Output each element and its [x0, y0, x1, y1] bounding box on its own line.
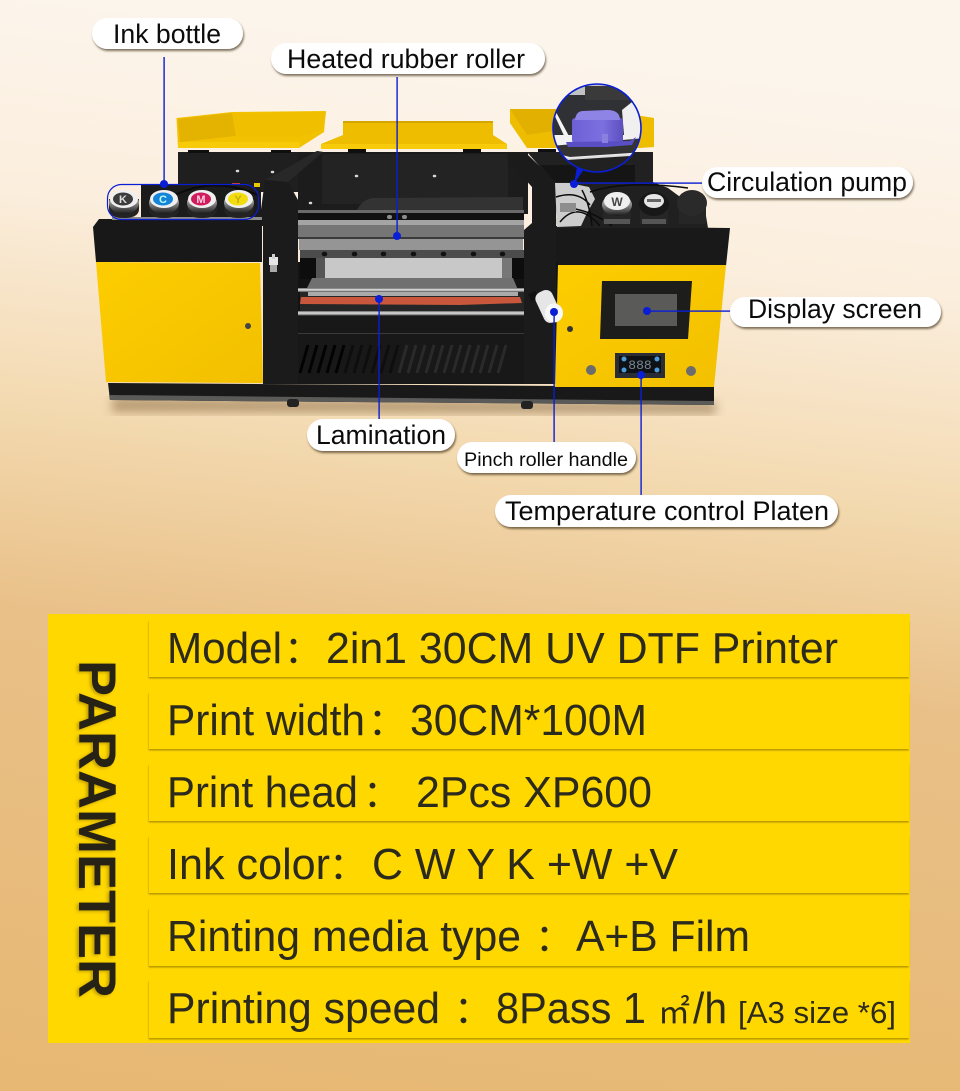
row: printing speed — [149, 979, 909, 1038]
label: Pinch roller handle — [457, 442, 636, 473]
ground shadow — [112, 398, 716, 414]
lamination leader — [375, 295, 383, 419]
row: printing speed: [A3 size *6] — [738, 995, 896, 1030]
bottle M: M — [196, 194, 206, 206]
row: model: Model — [167, 625, 282, 673]
side knob — [269, 254, 278, 272]
row: printing speed: 8Pass 1 — [496, 985, 646, 1033]
panel screws — [237, 171, 435, 203]
bottle W — [602, 192, 632, 224]
bottle C: C — [159, 194, 167, 206]
row: printing speed: ： — [454, 979, 492, 1034]
row: media type: ： — [535, 907, 573, 962]
temperature leader — [637, 371, 645, 495]
row: model: 2in1 30CM UV DTF Printer — [326, 625, 838, 673]
row: model: ： — [284, 619, 322, 674]
pinch roller handle — [528, 288, 563, 325]
lamination red plate — [300, 297, 522, 305]
row: printing speed: /h — [693, 985, 727, 1033]
label: Pinch roller handle: Pinch roller handle — [464, 449, 628, 471]
middle lid — [321, 121, 507, 149]
temperature controller — [615, 353, 665, 378]
row: ink color — [149, 835, 909, 893]
leader lines and dots — [108, 57, 731, 495]
row: print head: ： — [363, 763, 401, 818]
bottle white 2 — [639, 192, 669, 224]
left lid — [176, 111, 326, 148]
right yellow door — [555, 265, 726, 387]
row: ink color: Ink color — [167, 841, 330, 889]
temperature controller: 888 — [628, 358, 652, 373]
vent panel — [288, 333, 530, 384]
label: Circulation pump: Circulation pump — [707, 167, 907, 197]
main body — [93, 219, 730, 409]
row: print head — [149, 763, 909, 821]
label: Lamination: Lamination — [316, 420, 446, 450]
row: model — [149, 619, 909, 677]
top lids — [176, 109, 654, 149]
bottle K: K — [119, 194, 127, 206]
row: printing speed: ㎡ — [658, 987, 690, 1033]
bottle black cap — [677, 190, 707, 224]
drive belt — [357, 197, 523, 210]
row: printing speed: Printing speed — [167, 985, 440, 1033]
bottle W: W — [611, 195, 623, 209]
row: ink color: C W Y K +W +V — [372, 841, 678, 889]
label: Display screen: Display screen — [748, 294, 922, 324]
row: print width: Print width — [167, 697, 365, 745]
row: print head: 2Pcs XP600 — [416, 769, 652, 817]
row: ink color: ： — [329, 835, 367, 890]
bottle C — [149, 190, 179, 218]
row: print width: 30CM*100M — [410, 697, 647, 745]
label: Temperature control Platen: Temperature control Platen — [505, 496, 829, 526]
bottle Y: Y — [234, 194, 242, 206]
bottle K — [109, 190, 139, 218]
parameter panel — [48, 614, 910, 1043]
steel rods — [287, 288, 531, 316]
row: media type: A+B Film — [576, 913, 750, 961]
row: media type: Rinting media type — [167, 913, 521, 961]
row: print width: ： — [368, 691, 406, 746]
label: Heated rubber roller: Heated rubber roller — [287, 44, 525, 74]
ink bottle leader — [108, 57, 258, 220]
bottle M — [187, 190, 217, 218]
display screen — [600, 281, 692, 339]
right tank compartment — [555, 182, 708, 228]
row: print head: Print head — [167, 769, 358, 817]
display leader — [643, 307, 731, 315]
row: media type — [149, 907, 909, 966]
panel background — [48, 614, 910, 1043]
right lid — [510, 109, 654, 148]
label: Ink bottle: Ink bottle — [113, 19, 221, 49]
side columns — [260, 151, 556, 384]
bottle Y — [224, 190, 254, 218]
back panels — [178, 149, 653, 214]
left yellow door — [96, 262, 263, 383]
pump head — [566, 110, 636, 147]
ink bottles CMYK — [109, 183, 262, 227]
label: Ink bottle — [92, 18, 243, 49]
circulation pump leader — [570, 180, 703, 188]
roller bay — [287, 210, 531, 333]
printer illustration — [93, 109, 730, 414]
callout: circulation pump magnifier — [552, 83, 642, 181]
pinch handle leader — [550, 308, 558, 442]
row: print width — [149, 691, 909, 749]
vertical heading: PARAMETER — [67, 660, 126, 998]
heated roller leader — [393, 77, 401, 240]
